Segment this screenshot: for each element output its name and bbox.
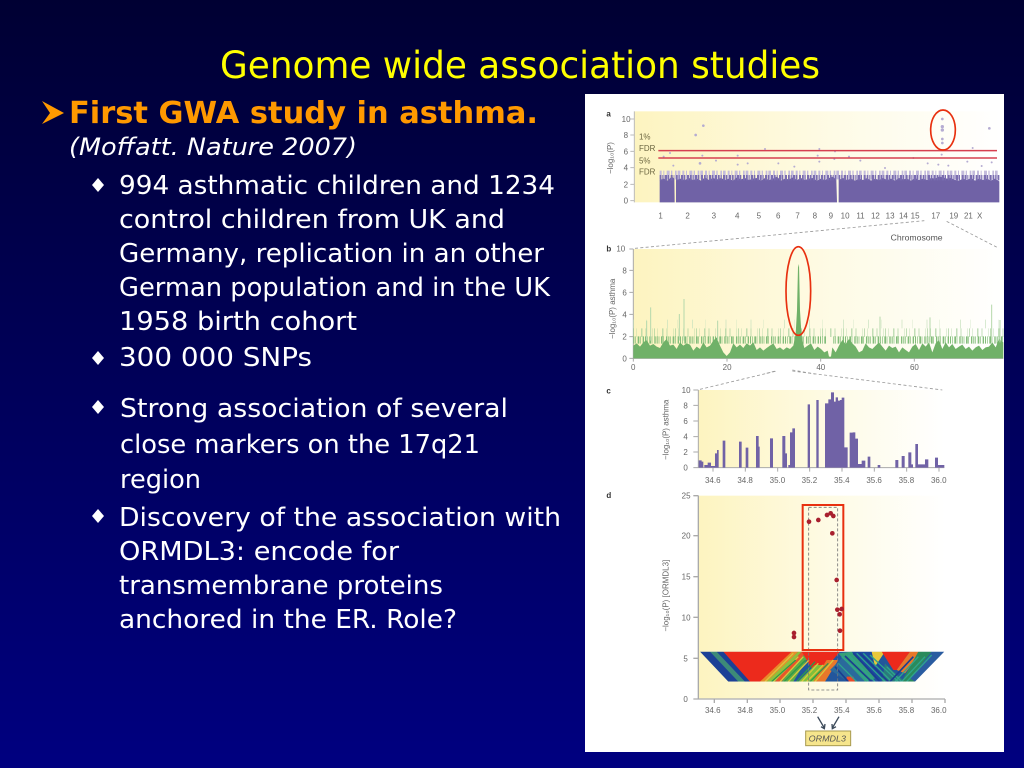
chromosome labels: 3 (712, 212, 717, 221)
axis labels: 35.6 (866, 476, 882, 485)
axis labels: 8 (622, 266, 627, 275)
y axis labels: 6 (624, 147, 629, 156)
axis labels: 35.0 (770, 706, 786, 715)
chromosome labels (658, 212, 983, 242)
axis labels: 35.8 (899, 476, 915, 485)
axis labels: d (606, 491, 611, 500)
highlight rectangle (803, 505, 843, 650)
zoom guide lines to c (700, 371, 942, 390)
chromosome labels: 12 (871, 212, 880, 221)
zoom guide lines b to c (767, 370, 815, 374)
axis labels: −log₁₀(P) asthma (608, 278, 617, 339)
title: Genome wide association studies (220, 44, 820, 87)
chromosome labels: 13 (886, 212, 895, 221)
axis labels: 34.8 (737, 706, 753, 715)
axis labels: 6 (622, 288, 627, 297)
axis labels: 6 (683, 417, 688, 426)
chromosome labels: 1 (658, 212, 663, 221)
FDR labels: FDR (639, 168, 656, 177)
axis labels (606, 386, 947, 485)
bullet: 17q21 association: close markers on the 17q21 (120, 430, 480, 460)
axis labels: 35.2 (802, 476, 818, 485)
LD heat map (698, 652, 947, 683)
bullet: ORMDL3: ORMDL3: encode for (119, 537, 399, 567)
axis labels: 34.6 (705, 706, 721, 715)
bullet: 17q21 association (92, 394, 508, 495)
axis labels: 8 (683, 401, 688, 410)
axis labels: b (606, 245, 611, 254)
axis labels: 20 (682, 532, 691, 541)
axis labels: 34.8 (737, 476, 753, 485)
y axis labels: 2 (624, 180, 629, 189)
axis labels (606, 245, 919, 372)
bullet: cohort (92, 171, 555, 337)
axis labels: c (606, 386, 611, 395)
chromosome labels: 14 (899, 212, 908, 221)
axis labels: 0 (622, 354, 627, 363)
FDR labels: FDR (639, 144, 656, 153)
chromosome labels: 6 (776, 212, 781, 221)
bullet: ORMDL3 (92, 503, 561, 635)
zoom guide lines a to b (635, 221, 998, 248)
axis labels: 5 (683, 654, 688, 663)
bullet: cohort: German population and in the UK (119, 273, 551, 303)
axis labels: 35.2 (802, 706, 818, 715)
axis labels: 0 (683, 464, 688, 473)
bullet: 17q21 association: Strong association of several (120, 394, 508, 424)
axis labels: 2 (683, 448, 688, 457)
bullet: cohort: 1958 birth cohort (119, 307, 357, 337)
FDR labels: 5% (639, 156, 651, 165)
axis labels: 10 (682, 613, 691, 622)
chart a: genome-wide Manhattan plot (606, 110, 1000, 248)
axis labels: 0 (683, 695, 688, 704)
axis labels: 2 (622, 333, 627, 342)
bullet: SNPs: 300 000 SNPs (119, 343, 312, 373)
chromosome labels: 19 (949, 212, 959, 221)
axis labels: 35.4 (834, 706, 850, 715)
chart b: chromosome 17 association (606, 245, 1003, 374)
bullet: cohort: control children from UK and (119, 205, 505, 235)
highlight ellipse (786, 247, 811, 335)
axis labels: 34.6 (705, 476, 721, 485)
chromosome labels: X (977, 212, 983, 221)
heading: first GWA study: First GWA study in asthma. (69, 96, 538, 131)
bullet: 17q21 association: region (120, 465, 201, 495)
axis labels: 20 (723, 363, 732, 372)
gene label: ORMDL3 (806, 731, 851, 746)
axis labels: 15 (682, 573, 691, 582)
axis labels: 60 (910, 363, 919, 372)
axis labels: 10 (682, 386, 691, 395)
axis labels: 35.8 (899, 706, 915, 715)
FDR labels (639, 133, 656, 177)
y axis labels: 0 (624, 197, 629, 206)
chromosome labels: 4 (735, 212, 740, 221)
axis labels: 0 (631, 363, 636, 372)
y axis labels: −log₁₀(P) (606, 142, 615, 174)
y axis labels: 4 (624, 164, 629, 173)
text block: study summary (42, 96, 561, 635)
bullet: ORMDL3: transmembrane proteins (119, 571, 443, 601)
chart c: fine-mapped asthma association bars (606, 371, 947, 485)
gene label: ORMDL3: ORMDL3 (809, 733, 846, 743)
axis labels (606, 491, 947, 715)
chromosome labels: 11 (856, 212, 865, 221)
bullet: cohort: 994 asthmatic children and 1234 (119, 171, 555, 201)
axis labels: 25 (682, 492, 691, 501)
FDR labels: 1% (639, 133, 651, 142)
axis labels: 35.6 (866, 706, 882, 715)
arrows to gene (818, 717, 839, 729)
citation: (Moffatt. Nature 2007) (69, 133, 357, 161)
chromosome labels: 2 (685, 212, 690, 221)
gene region dashed box (809, 507, 838, 690)
chromosome labels: 8 (813, 212, 818, 221)
y axis labels: 8 (624, 131, 629, 140)
axis labels: 35.4 (834, 476, 850, 485)
chromosome labels: 21 (964, 212, 973, 221)
chromosome labels: 5 (757, 212, 762, 221)
axis labels: 40 (816, 363, 826, 372)
chromosome labels: 7 (795, 212, 800, 221)
chromosome labels: Chromosome (891, 232, 943, 242)
FDR threshold lines (658, 151, 997, 158)
axis labels: 4 (683, 433, 688, 442)
panel: figure background (585, 94, 1004, 752)
expression data points (792, 511, 844, 639)
axis labels: −log₁₀(P) [ORMDL3] (661, 560, 670, 632)
chromosome labels: 17 (931, 212, 941, 221)
bullet: ORMDL3: Discovery of the association with (119, 503, 561, 533)
bullet: ORMDL3: anchored in the ER. Role? (119, 605, 457, 635)
axis labels: 35.0 (770, 476, 786, 485)
y axis labels (606, 110, 631, 206)
chromosome labels: 15 (911, 212, 920, 221)
highlight ellipse (931, 110, 955, 150)
chromosome labels: 9 (829, 212, 834, 221)
axis labels: 4 (622, 310, 627, 319)
y axis labels: 10 (622, 115, 631, 124)
y axis labels: a (606, 110, 611, 119)
axis labels: 10 (616, 245, 626, 254)
axis labels: 36.0 (931, 706, 947, 715)
axis labels: −log₁₀(P) asthma (661, 399, 670, 460)
arrow bullet (42, 101, 64, 124)
chart d: ORMDL3 expression association with LD map (606, 491, 947, 746)
axis labels: 36.0 (931, 476, 947, 485)
chromosome labels: 10 (841, 212, 850, 221)
bullet: cohort: Germany, replication in an other (119, 239, 544, 269)
